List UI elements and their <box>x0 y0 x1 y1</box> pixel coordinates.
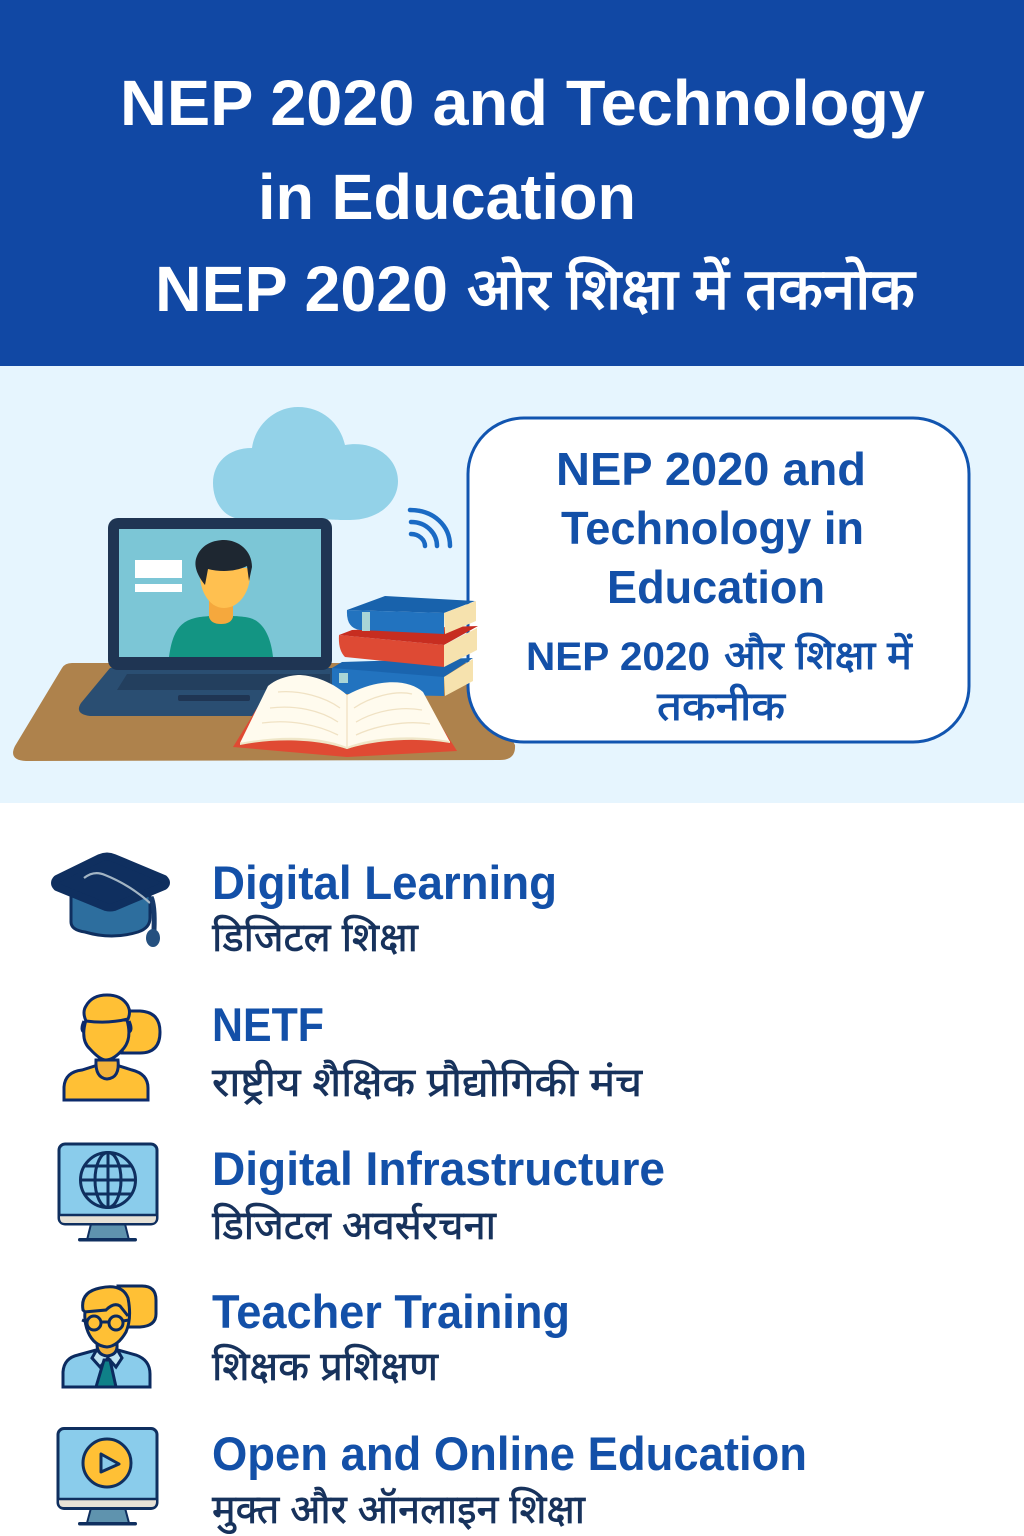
heading: Open and Online Education <box>212 1427 807 1480</box>
person on screen <box>169 540 273 657</box>
icon: graduation cap <box>55 856 166 947</box>
title: line 1: NEP 2020 and Technology <box>120 67 925 139</box>
card heading line 3: Education <box>607 561 825 613</box>
icon: cloud <box>213 407 398 520</box>
list item: Digital Learning <box>55 856 557 960</box>
open book <box>233 675 457 757</box>
laptop <box>79 518 340 716</box>
card Hindi line 1: और शिक्षा में <box>724 633 913 678</box>
heading: Teacher Training <box>212 1285 570 1338</box>
title: Hindi line <box>155 253 916 325</box>
callout card <box>468 418 969 742</box>
icon: wifi signal <box>410 510 450 546</box>
header banner <box>0 0 1024 366</box>
card Hindi line 1 <box>526 633 913 679</box>
title: Hindi line: NEP 2020 <box>155 253 448 325</box>
Hindi label: डिजिटल अवर्सरचना <box>212 1203 497 1248</box>
icon: person with speech bubble <box>64 995 160 1100</box>
heading: Digital Infrastructure <box>212 1142 665 1195</box>
card Hindi line 2: तकनीक <box>657 684 786 729</box>
card heading line 2: Technology in <box>561 502 864 554</box>
title: line 2: in Education <box>258 161 636 233</box>
book stack <box>332 596 478 696</box>
Hindi label: डिजिटल शिक्षा <box>212 915 419 960</box>
title: Hindi line: ओर शिक्षा में तकनोक <box>467 257 916 322</box>
icon: monitor with play button <box>58 1428 157 1526</box>
card heading line 1: NEP 2020 and <box>556 443 866 495</box>
card Hindi line 1: NEP 2020 <box>526 635 710 679</box>
Hindi label: शिक्षक प्रशिक्षण <box>212 1344 439 1389</box>
desk <box>13 663 515 761</box>
Hindi label: मुक्त और ऑनलाइन शिक्षा <box>212 1487 586 1533</box>
heading: Digital Learning <box>212 856 557 909</box>
heading: NETF <box>212 998 324 1051</box>
icon: teacher with glasses <box>63 1286 156 1387</box>
list item: NETF <box>64 995 643 1105</box>
Hindi label: राष्ट्रीय शैक्षिक प्रौद्योगिकी मंच <box>212 1060 643 1105</box>
list item: Teacher Training <box>63 1285 570 1389</box>
icon: monitor with globe <box>59 1144 157 1242</box>
panel: hero illustration band <box>0 366 1024 803</box>
list item: Open and Online Education <box>58 1427 807 1533</box>
list item: Digital Infrastructure <box>59 1142 665 1248</box>
